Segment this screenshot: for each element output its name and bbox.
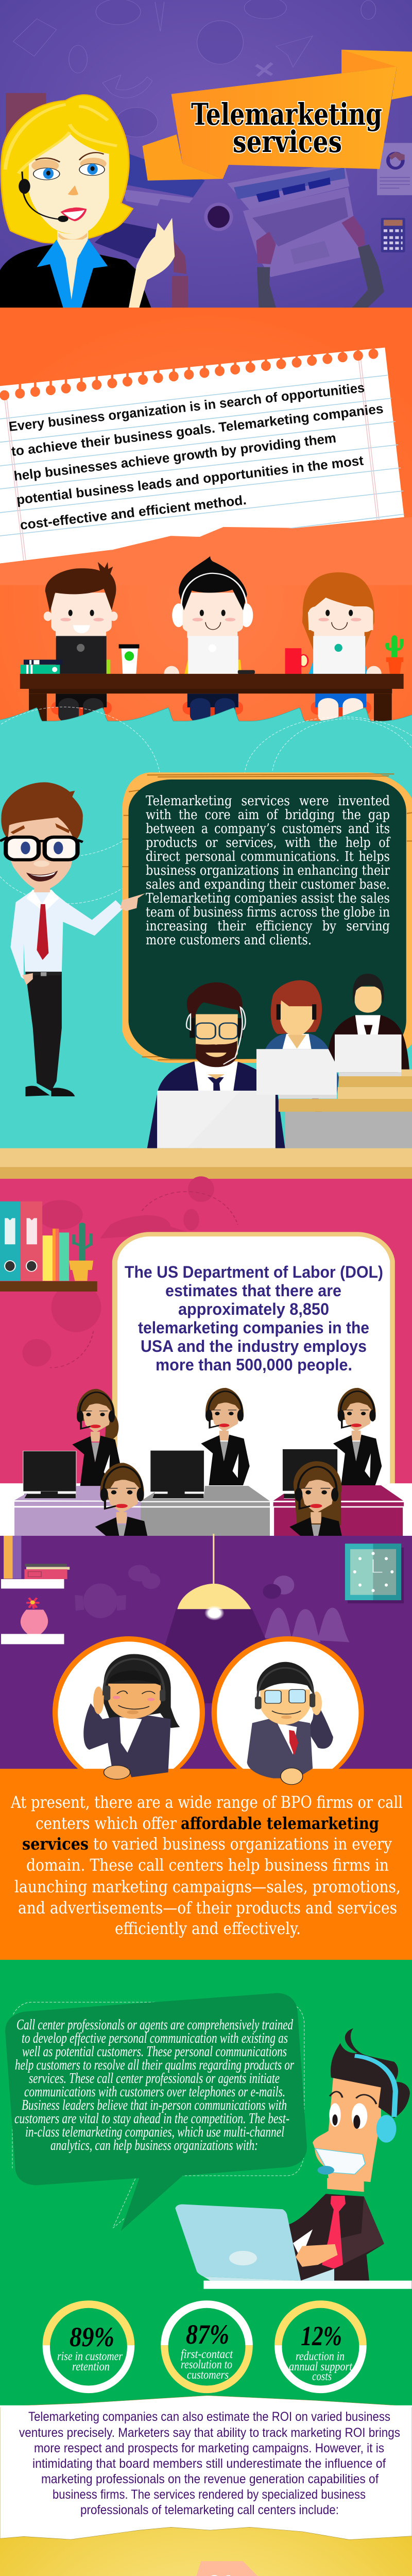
panel: green training section xyxy=(0,1960,412,2413)
BPO paragraph xyxy=(10,1792,403,1938)
speech bubble text xyxy=(14,2017,294,2154)
laptop on the desk xyxy=(227,162,362,277)
stat ring: 89%: retention xyxy=(72,2360,110,2374)
panel: teal blackboard section xyxy=(0,707,412,1179)
note text: Every business organization is in search of opportunities xyxy=(8,380,365,434)
blackboard text: more customers and clients. xyxy=(146,933,312,948)
wall clock xyxy=(345,1544,404,1603)
stat ring: 87%: first-contact xyxy=(181,2348,233,2361)
panel: purple header xyxy=(0,0,412,308)
stat ring: 89%: rise in customer xyxy=(57,2350,123,2363)
man with laptop and headset xyxy=(289,2028,410,2281)
board legs xyxy=(193,1060,330,1155)
lamp xyxy=(147,1534,294,1703)
DOL statistic text: USA and the industry employs xyxy=(141,1337,367,1355)
DOL statistic text: approximately 8,850 xyxy=(178,1300,329,1318)
speech bubble text: customers are vital to stay ahead in the competition. The best- xyxy=(14,2111,289,2127)
coworker: redhead girl xyxy=(302,572,382,682)
laptop xyxy=(175,2205,338,2281)
speech bubble text: in-class telemarketing companies, which use multi-channel xyxy=(25,2124,284,2140)
desktop monitor and keyboard xyxy=(95,154,205,308)
back row agents xyxy=(72,1388,382,1486)
orange band xyxy=(0,1769,412,1960)
panel: pink labor statistics xyxy=(0,1176,412,1575)
ROI paragraph: business firms. The services rendered by specialized business xyxy=(53,2487,366,2502)
BPO paragraph: efficiently and effectively. xyxy=(115,1919,301,1938)
stat ring: 87%: 87% xyxy=(186,2319,229,2350)
front row agents xyxy=(95,1461,346,1575)
calculator xyxy=(381,218,405,252)
faint call center doodles xyxy=(75,1565,350,1642)
desks xyxy=(14,1485,404,1536)
white floor xyxy=(0,1483,412,1538)
speech bubble xyxy=(5,1993,307,2231)
blackboard xyxy=(122,772,412,1063)
step 01 xyxy=(0,2561,266,2576)
title: services xyxy=(233,124,342,159)
red mug xyxy=(285,648,308,674)
dashed circles xyxy=(0,707,412,904)
speech bubble text: well as potential customers. These personal communications xyxy=(22,2044,287,2060)
coworker: boy with laptop xyxy=(44,562,118,674)
torn white ROI sheet xyxy=(0,2396,412,2539)
woman agent on headset xyxy=(83,1654,180,1779)
stat ring: 12%: costs xyxy=(312,2370,332,2383)
DOL statistic text xyxy=(125,1263,383,1374)
books behind agent xyxy=(6,93,46,137)
blackboard text xyxy=(146,793,391,948)
coffee cup xyxy=(204,202,233,231)
ROI paragraph: marketing professionals on the revenue generation capabilities of xyxy=(41,2472,379,2486)
stat ring: 12%: 12% xyxy=(301,2320,342,2351)
table with legs under xyxy=(20,674,404,723)
BPO paragraph: services xyxy=(22,1834,89,1854)
stat ring: 87% xyxy=(161,2300,253,2393)
white desk xyxy=(203,2281,411,2289)
ROI paragraph xyxy=(19,2410,400,2517)
coworker: girl with headband xyxy=(164,556,255,682)
cactus pot xyxy=(385,635,404,674)
dashed outline of speech bubble xyxy=(12,2002,304,2228)
agent with headset xyxy=(0,95,175,308)
stat ring: 87%: resolution to xyxy=(181,2358,232,2371)
binders on the shelf xyxy=(0,1201,97,1292)
report sheet with donut chart xyxy=(377,143,412,195)
note text: cost-effective and efficient method. xyxy=(19,492,247,533)
books and coffee cup xyxy=(21,645,139,674)
ROI paragraph: professionals of telemarketing call centers include: xyxy=(80,2503,339,2517)
speech bubble text: communications with customers over telephones or e-mails. xyxy=(24,2084,285,2100)
DOL statistic text: estimates that there are xyxy=(165,1281,341,1300)
speech bubble text: services. These call center professionals or agents initiate xyxy=(29,2071,280,2087)
man agent on headset xyxy=(247,1662,333,1785)
background doodles xyxy=(13,0,376,137)
note text: help businesses achieve growth by providing them xyxy=(13,430,337,484)
stat ring: 87%: customers xyxy=(187,2368,229,2382)
monitors xyxy=(23,1449,338,1498)
faint world map background xyxy=(22,1176,238,1368)
hands on laptop xyxy=(256,216,384,308)
DOL statistic text: telemarketing companies in the xyxy=(138,1318,369,1337)
stat ring: 12%: reduction in xyxy=(296,2350,345,2363)
stat ring: 12% xyxy=(274,2300,367,2393)
shelves with books and vase xyxy=(1,1536,70,1644)
white bulletin board xyxy=(112,1232,395,1484)
ROI paragraph: more respect and prospects for marketing campaigns. However, it is xyxy=(34,2441,384,2455)
woman agent middle xyxy=(256,980,339,1099)
speech bubble text: help customers to resolve all their qualms regarding products or xyxy=(15,2057,294,2073)
DOL statistic text: more than 500,000 people. xyxy=(156,1355,352,1374)
BPO paragraph: centers which offer xyxy=(36,1814,177,1833)
presenter with glasses xyxy=(0,782,145,1096)
torn notebook paper xyxy=(0,348,412,585)
panel: yellow services list xyxy=(0,2396,412,2576)
stat ring: 12%: annual support xyxy=(289,2360,353,2374)
ROI paragraph: intimidating that board members still underestimate the influence of xyxy=(32,2456,386,2471)
note text: to achieve their business goals. Telemarketing companies xyxy=(10,401,384,459)
speech bubble text: analytics, can help business organizations with: xyxy=(50,2138,258,2154)
DOL statistic text: The US Department of Labor (DOL) xyxy=(125,1263,383,1281)
panel: orange intro xyxy=(0,308,412,725)
speech bubble text: to develop effective personal communication with existing as xyxy=(22,2030,288,2046)
speech bubble text: Call center professionals or agents are comprehensively trained xyxy=(16,2017,294,2033)
man agent back xyxy=(329,974,409,1076)
right oval portrait frame xyxy=(212,1636,364,1788)
ribbon banner xyxy=(143,49,412,181)
wave edge xyxy=(0,708,412,1166)
speech bubble text: Business leaders believe that in-person communications with xyxy=(22,2097,287,2113)
stat ring: 89%: 89% xyxy=(70,2321,114,2352)
title xyxy=(191,97,382,159)
front agent with beard xyxy=(147,982,285,1148)
tiered desks xyxy=(0,1070,412,1179)
panel: purple room with BPO agents xyxy=(0,1534,412,1960)
note text: potential business leads and opportunities in the most xyxy=(15,452,365,507)
left oval portrait frame xyxy=(53,1636,205,1788)
stat ring: 89% xyxy=(43,2300,134,2393)
BPO paragraph: affordable telemarketing xyxy=(181,1814,379,1833)
note text xyxy=(8,380,384,533)
